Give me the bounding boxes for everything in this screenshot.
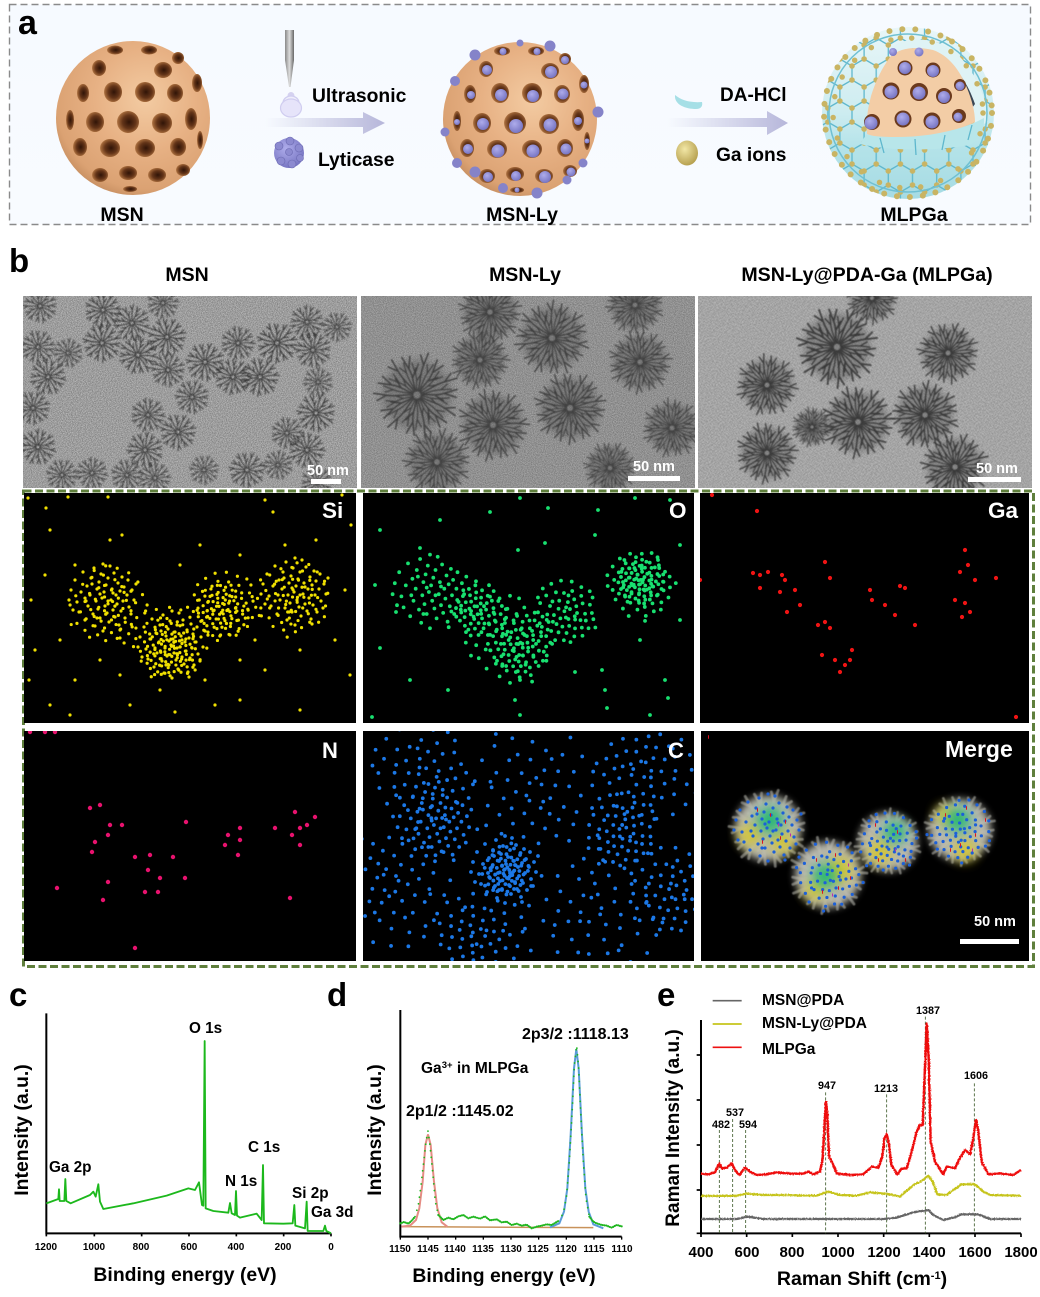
sphere: MSN: [56, 41, 210, 195]
scale bar: 50 nm: [960, 914, 1019, 944]
label: Ultrasonic: Ultrasonic: [312, 86, 407, 107]
ticks e: 1000: [821, 1244, 855, 1261]
ticks e: 1800: [1004, 1244, 1038, 1261]
label: Ga: Ga: [988, 498, 1019, 523]
TEM image: MLPGa: [698, 296, 1032, 488]
peak labels c: Ga 3d: [311, 1204, 354, 1221]
label: Si: Si: [322, 498, 343, 523]
chart c: XPS survey spectrum: [11, 1013, 354, 1286]
legend e: MSN@PDA: [762, 992, 844, 1009]
label: N: N: [322, 738, 338, 763]
scale bar: 50 nm: 50 nm: [633, 459, 675, 475]
panel letter b: b: [9, 242, 29, 279]
ticks d: 1110: [611, 1244, 633, 1255]
ticks c: [35, 1242, 334, 1253]
peak labels c: Si 2p: [292, 1185, 329, 1202]
peak labels d: 2p1/2 :1145.02: [406, 1103, 514, 1120]
panel letter d: d: [327, 976, 347, 1013]
x axis title e: ): [941, 1268, 947, 1290]
peak labels e: 482: [712, 1119, 730, 1131]
annotation: Ga3+ in MLPGa: Ga: [421, 1060, 442, 1077]
arrow: DA-HCl and Ga step: [667, 111, 788, 135]
peak labels e: 947: [818, 1080, 836, 1092]
heading: MSN-Ly: MSN-Ly: [489, 264, 561, 286]
peak labels c: O 1s: [189, 1020, 222, 1037]
map: C: [363, 731, 694, 961]
label: C: C: [668, 738, 684, 763]
scale bar: 50 nm: 50 nm: [307, 463, 349, 479]
peak labels c: N 1s: [225, 1173, 257, 1190]
ticks c: 600: [181, 1242, 198, 1253]
plot d: [400, 1010, 622, 1240]
arrow: ultrasonic and lyticase step: [265, 112, 385, 134]
ticks d: 1115: [583, 1244, 605, 1255]
panel letter c: c: [9, 976, 27, 1013]
peak labels e: 1387: [916, 1005, 940, 1017]
annotation: Ga3+ in MLPGa: 3+: [442, 1060, 453, 1071]
label: O: O: [669, 498, 687, 523]
y axis title d: Intensity (a.u.): [364, 1064, 386, 1196]
y axis title c: Intensity (a.u.): [11, 1064, 33, 1196]
ticks e: 800: [779, 1244, 805, 1261]
peak labels e: [712, 1005, 988, 1131]
peak labels e: 537: [726, 1107, 744, 1119]
map: Ga: [700, 493, 1029, 723]
ticks d: 1130: [500, 1244, 522, 1255]
ticks d: 1120: [555, 1244, 577, 1255]
merged particles: [708, 737, 1008, 924]
ticks c: 400: [228, 1242, 245, 1253]
peak labels e: 1213: [874, 1083, 898, 1095]
x axis title e: -1: [931, 1270, 941, 1282]
ticks e: 1200: [867, 1244, 901, 1261]
map: Merge: [701, 731, 1029, 961]
plot c: [46, 1013, 331, 1236]
ticks d: [389, 1244, 633, 1255]
scale bar: 50 nm: 50 nm: [976, 461, 1018, 477]
ticks c: 1000: [83, 1242, 106, 1253]
heading: MSN-Ly@PDA-Ga (MLPGa): MSN-Ly@PDA-Ga (MLPGa): [741, 264, 993, 286]
legend e: MLPGa: [762, 1041, 816, 1058]
TEM image: MSN: [23, 296, 357, 488]
TEM image: MSN-Ly: [361, 296, 695, 488]
scale bar: 50 nm: [968, 461, 1021, 482]
ticks d: 1140: [444, 1244, 466, 1255]
legend e: MSN-Ly@PDA: [762, 1015, 867, 1032]
peak labels c: C 1s: [248, 1139, 280, 1156]
ticks e: [688, 1244, 1038, 1261]
y axis title e: Raman Intensity (a.u.): [663, 1029, 684, 1227]
label: Lyticase: Lyticase: [318, 150, 395, 171]
peak labels c: [49, 1020, 354, 1221]
plot e: [697, 1001, 1021, 1237]
peak labels d: 2p3/2 :1118.13: [522, 1026, 629, 1043]
icon: lyticase enzyme: [274, 137, 304, 168]
x axis title d: Binding energy (eV): [412, 1265, 596, 1287]
legend e: [762, 992, 867, 1058]
ticks e: 1600: [958, 1244, 992, 1261]
ticks c: 200: [275, 1242, 292, 1253]
peak labels e: 1606: [964, 1070, 988, 1082]
label: Merge: Merge: [945, 736, 1013, 762]
ticks e: 600: [734, 1244, 760, 1261]
ticks c: 1200: [35, 1242, 58, 1253]
panel letter a: a: [18, 4, 38, 42]
annotation: Ga3+ in MLPGa: in MLPGa: [453, 1060, 529, 1077]
ticks e: 400: [688, 1244, 714, 1261]
label: MLPGa: MLPGa: [880, 204, 948, 226]
scale bar: 50 nm: [628, 459, 680, 481]
panel: EDS elemental maps: [24, 491, 1034, 1012]
ticks d: 1125: [527, 1244, 549, 1255]
ticks c: 800: [133, 1242, 150, 1253]
panel letter e: e: [657, 976, 675, 1013]
map: O: [363, 493, 694, 723]
label: DA-HCl: DA-HCl: [720, 85, 786, 106]
chart d: Ga 2p spectrum: [364, 1010, 633, 1287]
panel a: synthesis scheme: [10, 4, 1030, 226]
chart e: Raman spectra: [663, 992, 1038, 1290]
peak labels d: [406, 1026, 629, 1120]
ticks d: 1135: [472, 1244, 494, 1255]
map: Si: [24, 493, 356, 723]
icon: DA-HCl molecule: [675, 95, 702, 109]
ticks d: 1145: [417, 1244, 439, 1255]
label: Ga ions: Ga ions: [716, 145, 786, 166]
x axis title e: Raman Shift (cm: [777, 1268, 931, 1290]
scale bar: 50 nm: 50 nm: [974, 914, 1016, 930]
sphere: MLPGa: [822, 27, 994, 199]
x axis title c: Binding energy (eV): [93, 1264, 277, 1286]
sphere: MSN-Ly: [440, 40, 604, 198]
icon: ultrasonic probe: [280, 30, 302, 117]
label: MSN: MSN: [100, 204, 144, 226]
ticks d: 1150: [389, 1244, 411, 1255]
map: N: [24, 731, 356, 961]
ticks c: 0: [328, 1242, 334, 1253]
ticks e: 1400: [912, 1244, 946, 1261]
peak labels e: 594: [739, 1119, 757, 1131]
label: MSN-Ly: MSN-Ly: [486, 204, 558, 226]
icon: Ga ion: [676, 140, 698, 166]
heading: MSN: MSN: [165, 264, 209, 286]
peak labels c: Ga 2p: [49, 1159, 92, 1176]
